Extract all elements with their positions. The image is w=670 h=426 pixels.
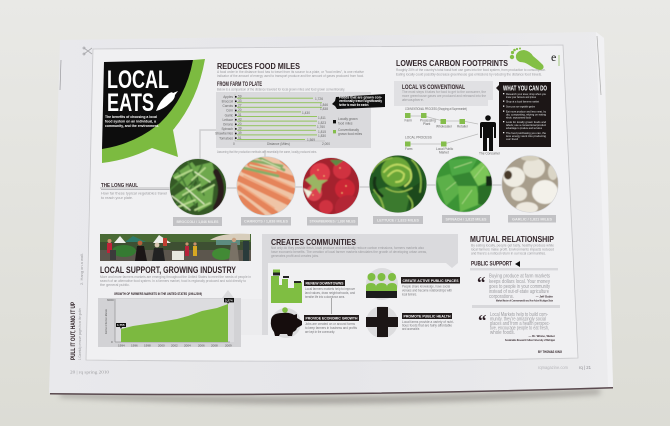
text block: The Long Haul: THE LONG HAUL	[101, 183, 138, 189]
chart legend: Locally grown	[338, 117, 358, 121]
magazine logo: e	[551, 50, 556, 64]
bar chart: food miles: Broccoli	[222, 100, 233, 104]
chart footnote: Assuming that the production methods are essentially the same, locally produced wins.	[217, 150, 317, 154]
banner subtitle: The benefits of choosing a local	[105, 114, 157, 119]
callout: black label: further to reach the market.	[339, 103, 369, 107]
banner subtitle: food system on an individual, a	[105, 118, 157, 124]
area chart: growth of farmers markets: Number of Farmers Markets	[104, 309, 108, 334]
bar chart: food miles	[215, 92, 371, 148]
subheading: Public Support	[470, 261, 558, 270]
food mileage labels: GARLIC / 1,821 MILES	[512, 217, 553, 221]
section heading: Lowers Carbon Footprints: Roughly 20% of the country's total fossil fuel use goes into the food system, from production to consumption.	[396, 68, 546, 72]
item: Provide Economic Growth: to keep farmers in business and profits	[305, 326, 357, 330]
item: Renew Downtowns: Local farmers markets help to improve	[305, 287, 355, 291]
bar chart: food miles: 1,838	[320, 107, 328, 111]
quote: Jeff Dubin: Buying produce at farm markets	[489, 274, 550, 280]
bar chart: food miles: Lettuce	[223, 118, 233, 122]
side note: pull it out: 1 Carefully remove pages from the gutter	[78, 307, 82, 360]
bar chart: food miles: 1,815	[318, 130, 326, 134]
icon: people group	[366, 268, 398, 300]
page number right: rqmagazine.com	[538, 365, 568, 370]
item: Promote Public Health: Local farms provide a variety of nutri-	[402, 320, 454, 324]
heading: Local Support, Growing Industry: LOCAL SUPPORT, GROWING INDUSTRY	[100, 265, 236, 275]
bar chart: food miles: 1,811	[318, 116, 326, 120]
chart legend: Conventionally	[338, 128, 359, 132]
quote: Dr. Winne: Local Markets help to build com-	[490, 312, 548, 318]
food mileage labels: STRAWBERRIES / 1,830 MILES	[310, 220, 356, 224]
area chart: growth of farmers markets: 1996	[131, 344, 138, 348]
food mileage labels	[173, 215, 556, 226]
bar chart: food miles: 1,846	[320, 103, 328, 107]
area chart: growth of farmers markets: 2004	[184, 344, 191, 348]
item: Renew Downtowns: RENEW DOWNTOWNS	[306, 280, 344, 286]
bar chart: food miles: 51	[238, 136, 242, 140]
food mileage labels: LETTUCE / 1,823 MILES	[377, 218, 420, 222]
heading: Mutual Relationship: MUTUAL RELATIONSHIP	[470, 234, 554, 244]
magazine spread	[49, 32, 613, 395]
area chart: growth of farmers markets: 1,755	[117, 323, 125, 327]
banner subtitle: community, and the environment.	[105, 123, 159, 128]
section heading: Reduces Food Miles: indicator of the amount of energy used to transport produce and the amount of gases produced from food.	[217, 74, 364, 78]
panel: What You Can Do: Shop at a local farmers market	[506, 100, 539, 104]
area chart: growth of farmers markets: GROWTH OF FARMERS MARKETS IN THE UNITED STATES (1994-2009)	[114, 292, 202, 296]
panel: Creates Communities: have economic benefits. The creation of local farmer markets stimulates the growth of developing urban areas,	[271, 250, 427, 254]
panel: What You Can Do: Eat more produce and less meat, by	[506, 110, 546, 114]
quote: Jeff Dubin: “	[477, 273, 486, 292]
title: LOCAL EATS: EATS	[107, 89, 154, 117]
item: Promote Public Health: tious foods that are fairly affordable	[402, 324, 452, 328]
panel: Creates Communities	[241, 234, 458, 335]
area chart: growth of farmers markets: 6000	[107, 298, 114, 302]
food mileage labels: CARROTS / 1,838 MILES	[244, 220, 289, 224]
area chart: growth of farmers markets	[98, 290, 241, 348]
byline: BY THOMAS KING	[538, 350, 562, 354]
icon: chili pepper	[156, 91, 178, 111]
callout: black label	[332, 94, 385, 109]
quote: Jeff Dubin: keeps dollars local. Your money	[489, 279, 550, 285]
area chart: growth of farmers markets: 1994	[118, 344, 125, 348]
food photo: strawberries	[302, 158, 360, 214]
bar chart: food miles: 20	[238, 108, 242, 112]
icon: piggy bank	[271, 307, 302, 338]
panel: What You Can Do: our food	[506, 137, 518, 141]
bar chart: food miles: Garlic	[225, 113, 233, 117]
food photo: lettuce	[368, 155, 428, 215]
bar chart: food miles: 0	[233, 142, 235, 146]
item: Promote Public Health: PROMOTE PUBLIC HEALTH	[404, 314, 451, 318]
item: Promote Public Health: and accessible.	[402, 327, 420, 331]
area chart: growth of farmers markets: 2000	[158, 344, 165, 348]
title: LOCAL EATS	[107, 66, 169, 117]
panel: What You Can Do: labels; use a conventional product	[506, 123, 546, 127]
bar chart: food miles: 1,726	[315, 97, 323, 101]
panel: Local vs Conventional: more greenhouse gases are produced and released into the	[402, 94, 486, 98]
food photo: broccoli	[168, 157, 228, 217]
panel: What You Can Do: Look for locally grown foods and	[506, 120, 546, 124]
bar chart: food miles: 39	[238, 131, 242, 135]
icon: green footprint	[510, 48, 544, 70]
item: Create Active Public Spaces: venues and become relationships with	[402, 288, 452, 292]
bar chart: food miles: Distance (Miles)	[267, 142, 290, 146]
bar chart: food miles: 1,823	[318, 121, 326, 125]
area chart: growth of farmers markets: 1998	[144, 344, 151, 348]
section heading: Reduces Food Miles	[217, 61, 364, 78]
chart legend: food miles	[338, 122, 353, 126]
heading: Local Support, Growing Industry	[100, 265, 251, 287]
panel: What You Can Do: Grow your own vegetable garden	[506, 104, 535, 108]
banner subtitle	[105, 114, 159, 128]
quote: Dr. Winne: munity. they're amazingly social	[490, 316, 546, 322]
heading: Local Support, Growing Industry: More and more farmers markets are emerging throughout the United States to meet the needs of people in	[100, 275, 251, 279]
connector lines between sections	[100, 130, 502, 188]
heading: Mutual Relationship: and there's a noticed return in our local communities.	[471, 252, 546, 256]
bar chart: food miles: 59	[238, 94, 242, 98]
item: Promote Public Health	[402, 313, 454, 331]
bar chart: food miles: 27	[238, 104, 242, 108]
section heading: Reduces Food Miles: REDUCES FOOD MILES	[217, 61, 300, 71]
section heading: Lowers Carbon Footprints: Eating locally could possibly decrease greenhouse gas emissions by reducing the distance food travels.	[396, 72, 542, 76]
item: Provide Economic Growth: are kept in the community.	[305, 330, 335, 334]
area chart: growth of farmers markets: 5,274	[225, 298, 233, 302]
title: LOCAL EATS: LOCAL	[107, 66, 169, 94]
icon: green buildings	[271, 270, 302, 303]
flow diagram: food process: Local Public	[436, 147, 454, 151]
inner page frame	[86, 45, 578, 361]
quote: Dr. Winne: — Dr. Winne, Weber	[528, 334, 556, 338]
flow diagram: food process	[404, 107, 478, 154]
panel: What You Can Do: know your farmers and prices	[506, 95, 536, 99]
section heading: Reduces Food Miles: A food order in the distance food has to travel from its source to a plate, or "food miles", is one relative	[217, 70, 364, 74]
item: Renew Downtowns	[304, 280, 355, 299]
area chart: growth of farmers markets: 2006	[198, 344, 205, 348]
quote: Jeff Dubin: instead of out-of-state agriculture	[489, 289, 549, 295]
subheading: Public Support: PUBLIC SUPPORT	[471, 262, 512, 268]
item: Provide Economic Growth: PROVIDE ECONOMIC GROWTH	[306, 316, 358, 320]
flow diagram: food process: LOCAL PROCESS	[405, 136, 432, 140]
quote: Jeff Dubin: goes to people in your community	[489, 284, 550, 290]
quote: Dr. Winne: Sustainable Research Fellow University of Michigan	[505, 338, 555, 342]
quote: Jeff Dubin: Market Master of Commonwealth and Ann Arbor Michigan State	[496, 298, 553, 302]
icon: medical cross	[366, 306, 398, 338]
flow diagram: food process: CONVENTIONAL PROCESS (Shopping at Supermarket)	[405, 107, 467, 111]
item: Renew Downtowns: land values, draw neighborhoods, and	[305, 291, 355, 295]
flow diagram: food process: Farm	[404, 118, 412, 122]
green ribbon	[102, 59, 205, 163]
quote: Dr. Winne	[478, 311, 556, 342]
heading: Mutual Relationship: local farmers make profit. Environments impacts reduced	[471, 248, 554, 252]
panel: Local vs Conventional	[394, 81, 493, 106]
panel: Creates Communities: Not only do they provide fresh, local produce and drastically reduce carbon emissions, farmers markets also	[271, 246, 424, 250]
quote: Dr. Winne: whole foods.	[490, 330, 515, 336]
section heading: Lowers Carbon Footprints: LOWERS CARBON FOOTPRINTS	[396, 58, 508, 68]
bar chart: food miles: 43	[238, 117, 242, 121]
page number right: rq | 21	[579, 365, 592, 370]
bar chart: food miles: 31	[238, 113, 242, 117]
item: Create Active Public Spaces	[401, 277, 460, 296]
panel: What You Can Do: dry, composting, relying on eating	[506, 112, 546, 116]
heading: Local Support, Growing Industry: search of an alternative food system. In a farmers market, food is regionally produced and sold directly to	[100, 279, 246, 283]
bar chart: food miles: Apples	[223, 95, 233, 99]
bar chart: food miles: 33	[238, 99, 242, 103]
bar chart: food miles: 20	[238, 122, 242, 126]
item: Renew Downtowns: breathe life into a downtown area.	[305, 295, 345, 299]
bar chart: food miles: 1,569	[307, 138, 315, 142]
page number right	[538, 365, 592, 370]
area chart: growth of farmers markets: 2009	[225, 344, 232, 348]
panel: What You Can Do	[496, 82, 551, 147]
section heading: Lowers Carbon Footprints	[396, 58, 546, 76]
heading: Local Support, Growing Industry: the general public.	[100, 283, 130, 287]
area chart: growth of farmers markets: 0	[111, 340, 113, 344]
panel: Creates Communities: CREATES COMMUNITIES	[271, 237, 356, 247]
callout: black label: ventionally travel significantly	[339, 99, 382, 103]
bar chart: food miles: 1,430	[302, 111, 310, 115]
side note: pull it out	[71, 253, 84, 360]
text block: The Long Haul	[101, 183, 170, 200]
bar chart: food miles: 1,760	[317, 125, 325, 129]
panel: What You Can Do: The food purchasing you can, the	[506, 131, 546, 135]
heading: Mutual Relationship: By eating locally, people get tasty, healthy produce while	[471, 244, 554, 248]
item: Create Active Public Spaces: People share knowledge, have social	[402, 284, 450, 288]
food mileage labels: BROCCOLI / 1,846 MILES	[176, 220, 219, 224]
quote: Jeff Dubin: corporations.	[489, 294, 514, 300]
panel: What You Can Do: less energy went into producing	[506, 134, 546, 138]
bar chart: food miles: 39	[238, 127, 242, 131]
panel: Local vs Conventional: LOCAL VS CONVENTIONAL	[402, 84, 465, 91]
panel: Creates Communities: generates profit and creates jobs.	[271, 254, 319, 258]
quote: Dr. Winne: places and from a health perspec-	[490, 321, 550, 327]
chart legend	[333, 117, 363, 136]
chart heading: From Farm to Plate: Below is a comparison of the distance traveled for local grown miles and food grown conventionally.	[217, 88, 345, 92]
flow diagram: food process: Processing	[420, 118, 436, 122]
chart heading: From Farm to Plate	[217, 82, 345, 92]
food photo: garlic	[501, 155, 559, 214]
flow diagram: food process: Market	[439, 150, 449, 154]
panel: What You Can Do: Research your area; shop when you	[506, 92, 546, 96]
item: Create Active Public Spaces: local farmers.	[402, 292, 417, 296]
bar chart: food miles: Corn	[226, 109, 233, 113]
item: Provide Economic Growth	[304, 315, 359, 334]
flow diagram: food process: Retailer	[457, 124, 469, 128]
heading: Mutual Relationship	[470, 234, 554, 256]
bar chart: food miles: Tomatoes	[219, 136, 233, 140]
area chart: growth of farmers markets: 2002	[171, 344, 178, 348]
item: Create Active Public Spaces: CREATE ACTIVE PUBLIC SPACES	[402, 278, 459, 283]
text block: The Long Haul: How far these typical vegetables travel	[101, 192, 167, 196]
panel: Local vs Conventional: atmosphere.	[402, 98, 424, 102]
bar chart: food miles: 1,830	[318, 134, 326, 138]
magazine logo	[551, 50, 559, 66]
panel: What You Can Do: advantage to produce and services	[506, 126, 542, 130]
chart heading: From Farm to Plate: FROM FARM TO PLATE	[217, 82, 262, 88]
food photo: carrots	[236, 156, 298, 216]
bar chart: food miles: Strawberries	[215, 132, 233, 136]
text block: The Long Haul: to reach your plate.	[101, 196, 133, 200]
icon: consumer figure	[479, 115, 501, 156]
side note: pull it out: 2. Hang on a wall.	[80, 253, 84, 285]
quote: Jeff Dubin: — Jeff Dubin	[536, 294, 553, 298]
icon: scissors crop mark	[83, 47, 92, 55]
bar chart: food miles: 2,000	[322, 142, 330, 146]
panel: Local vs Conventional: The most steps it takes for food to get to the consumer, the	[402, 90, 486, 94]
icon: consumer figure: The Consumer	[479, 152, 501, 156]
panel: What You Can Do: WHAT YOU CAN DO	[503, 86, 547, 92]
area chart: growth of farmers markets: 2008	[211, 344, 218, 348]
black shield	[102, 60, 193, 149]
banner: Local Eats	[102, 59, 205, 163]
flow diagram: food process: Farm	[405, 147, 413, 151]
quote: Dr. Winne: tive, encourage people to eat fresh,	[490, 326, 549, 332]
callout: black label: Foods that are grown con-	[339, 96, 382, 100]
panel: What You Can Do: whole, unprocessed foods	[506, 116, 531, 120]
food photo: spinach	[435, 155, 493, 213]
bar chart: food miles: Onions	[223, 122, 233, 126]
page number left: 20 | rq spring 2010	[70, 370, 109, 374]
food mileage labels: SPINACH / 1,815 MILES	[446, 218, 487, 222]
quote: Jeff Dubin	[472, 273, 560, 308]
flow diagram: food process: Wholesaler	[436, 124, 453, 128]
item: Provide Economic Growth: Jobs are created on or around farms	[305, 322, 355, 326]
flow diagram: food process: Plant	[423, 122, 430, 126]
chart legend: grown food miles	[338, 132, 363, 136]
bar chart: food miles: Spinach	[221, 127, 233, 131]
quote: Dr. Winne: “	[478, 311, 486, 330]
magazine shadow	[60, 389, 600, 404]
bar chart: food miles: Carrots	[223, 104, 233, 108]
side note: pull it out: PULL IT OUT, HANG IT UP	[71, 302, 77, 360]
photo: farmers market	[100, 234, 251, 261]
